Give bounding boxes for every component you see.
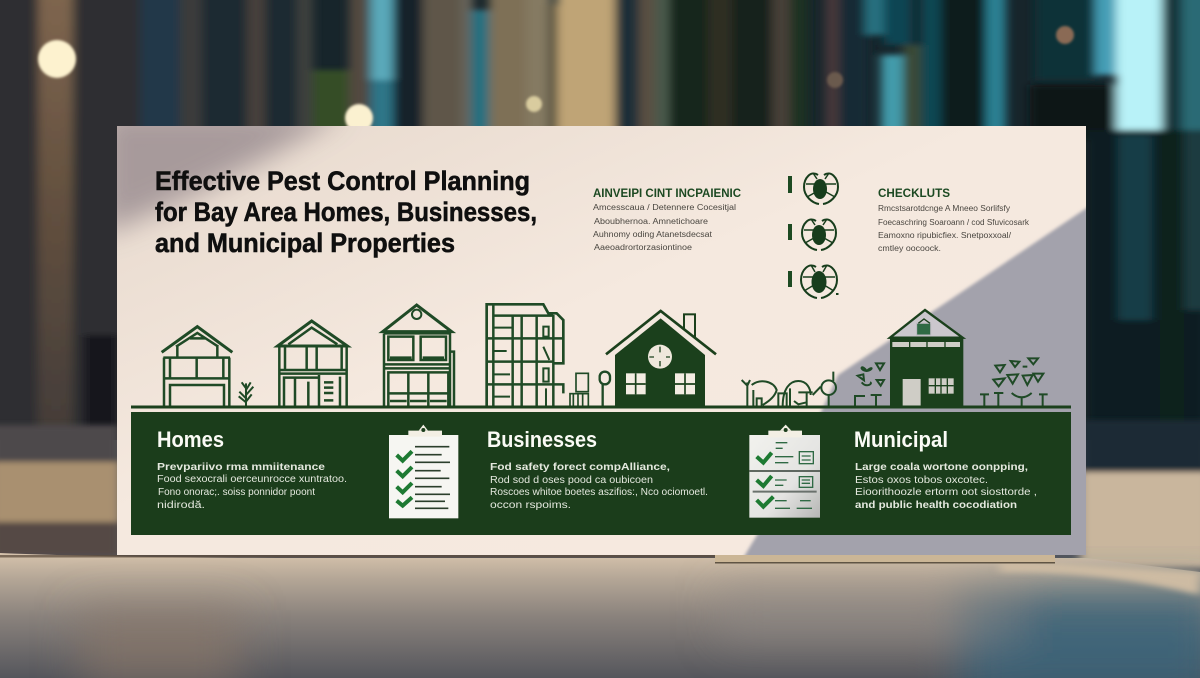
section: homes: Fono onorac;. soiss ponnidor poont xyxy=(158,487,315,498)
icon: small plant xyxy=(239,382,253,407)
section: homes: Homes xyxy=(157,427,224,452)
icon: house 1 xyxy=(162,327,232,407)
icon: bug 3 xyxy=(801,265,837,298)
icon: house 3 xyxy=(383,305,454,407)
title: and Municipal Properties xyxy=(155,228,455,258)
background: floor xyxy=(0,420,1200,678)
section: businesses: occon rspoims. xyxy=(490,500,571,511)
text block: checklists column: cmtley oocoock. xyxy=(878,244,941,253)
text block: inspection column: Auhnomy oding Atanetsdecsat xyxy=(593,230,713,239)
section: municipal xyxy=(854,427,1037,511)
section: businesses: Rod sod d oses pood ca oubicoen xyxy=(490,475,653,486)
text block: checklists column: Foecaschring Soaroann / cod Sfuvicosark xyxy=(878,218,1030,227)
text block: checklists column: CHECKLUTS xyxy=(878,186,950,200)
icon: clipboard checklist xyxy=(389,425,458,518)
text block: inspection column xyxy=(593,188,741,252)
icon: house 2 xyxy=(278,321,347,407)
board base plate xyxy=(0,555,1055,564)
icon: clipboard with forms xyxy=(749,425,820,518)
section: municipal: and public health cocodiation xyxy=(855,500,1017,511)
section: homes xyxy=(157,427,347,511)
section: municipal: Municipal xyxy=(854,427,948,452)
section: homes: Food sexocrali oerceunrocce xuntratoo. xyxy=(157,474,347,485)
text block: inspection column: Aboubhernoa. Amnetichoare xyxy=(594,217,709,226)
icon: lamp post xyxy=(600,372,610,407)
title: Effective Pest Control Planning xyxy=(155,166,530,196)
title xyxy=(155,166,537,258)
icon: heart plants left xyxy=(855,363,884,407)
section: homes: Prevpariivo rma mmiitenance xyxy=(157,462,326,473)
icon: heart plants right xyxy=(980,358,1048,407)
icon: utility box xyxy=(570,373,588,407)
text block: inspection column: Aaeoadrortorzasiontinoe xyxy=(594,243,693,252)
text block: checklists column: Rmcstsarotdcnge A Mneeo Sorlifsfy xyxy=(878,204,1010,213)
icon: filled house with clock xyxy=(606,311,716,407)
board shadow right xyxy=(742,199,1100,560)
section: homes: nidirodă. xyxy=(157,500,205,511)
board shadow top-left xyxy=(117,126,339,242)
text block: inspection column: Amcesscaua / Detennere Cocesitjal xyxy=(593,203,736,212)
icon column: pest markers xyxy=(788,173,838,298)
icon: bug 2 xyxy=(802,219,836,250)
ground line xyxy=(131,406,1071,408)
illustration: skyline right xyxy=(600,310,1048,407)
icon: bug 1 xyxy=(804,173,838,204)
icon: garden shrubs xyxy=(742,372,836,407)
panel: board xyxy=(100,110,1100,560)
decorative lights xyxy=(38,26,1074,132)
panel: green audience band xyxy=(131,412,1071,535)
icon: apartment building xyxy=(487,304,563,407)
icon: municipal building xyxy=(890,310,963,407)
section: businesses: Businesses xyxy=(487,427,597,452)
section: businesses: Roscoes whitoe boetes aszifios:, Nco ociomoetl. xyxy=(490,487,708,498)
text block: inspection column: AINVEIPI CINT INCPAIENIC xyxy=(593,188,741,200)
background: blurred building facade xyxy=(0,0,1200,460)
section: municipal: Eioorithoozle ertorm oot siosttorde , xyxy=(855,487,1037,498)
text block: checklists column: Eamoxno ripubicfiex. Snetpoxxoal/ xyxy=(878,231,1012,240)
section: municipal: Estos oxos tobos oxcotec. xyxy=(855,475,988,486)
section: municipal: Large coala wortone oonpping, xyxy=(855,462,1028,473)
title: for Bay Area Homes, Businesses, xyxy=(155,197,537,227)
text block: checklists column xyxy=(878,186,1030,253)
section: businesses: Fod safety forect compAlliance, xyxy=(490,462,670,473)
illustration: skyline left xyxy=(162,304,588,407)
section: businesses xyxy=(487,427,708,511)
